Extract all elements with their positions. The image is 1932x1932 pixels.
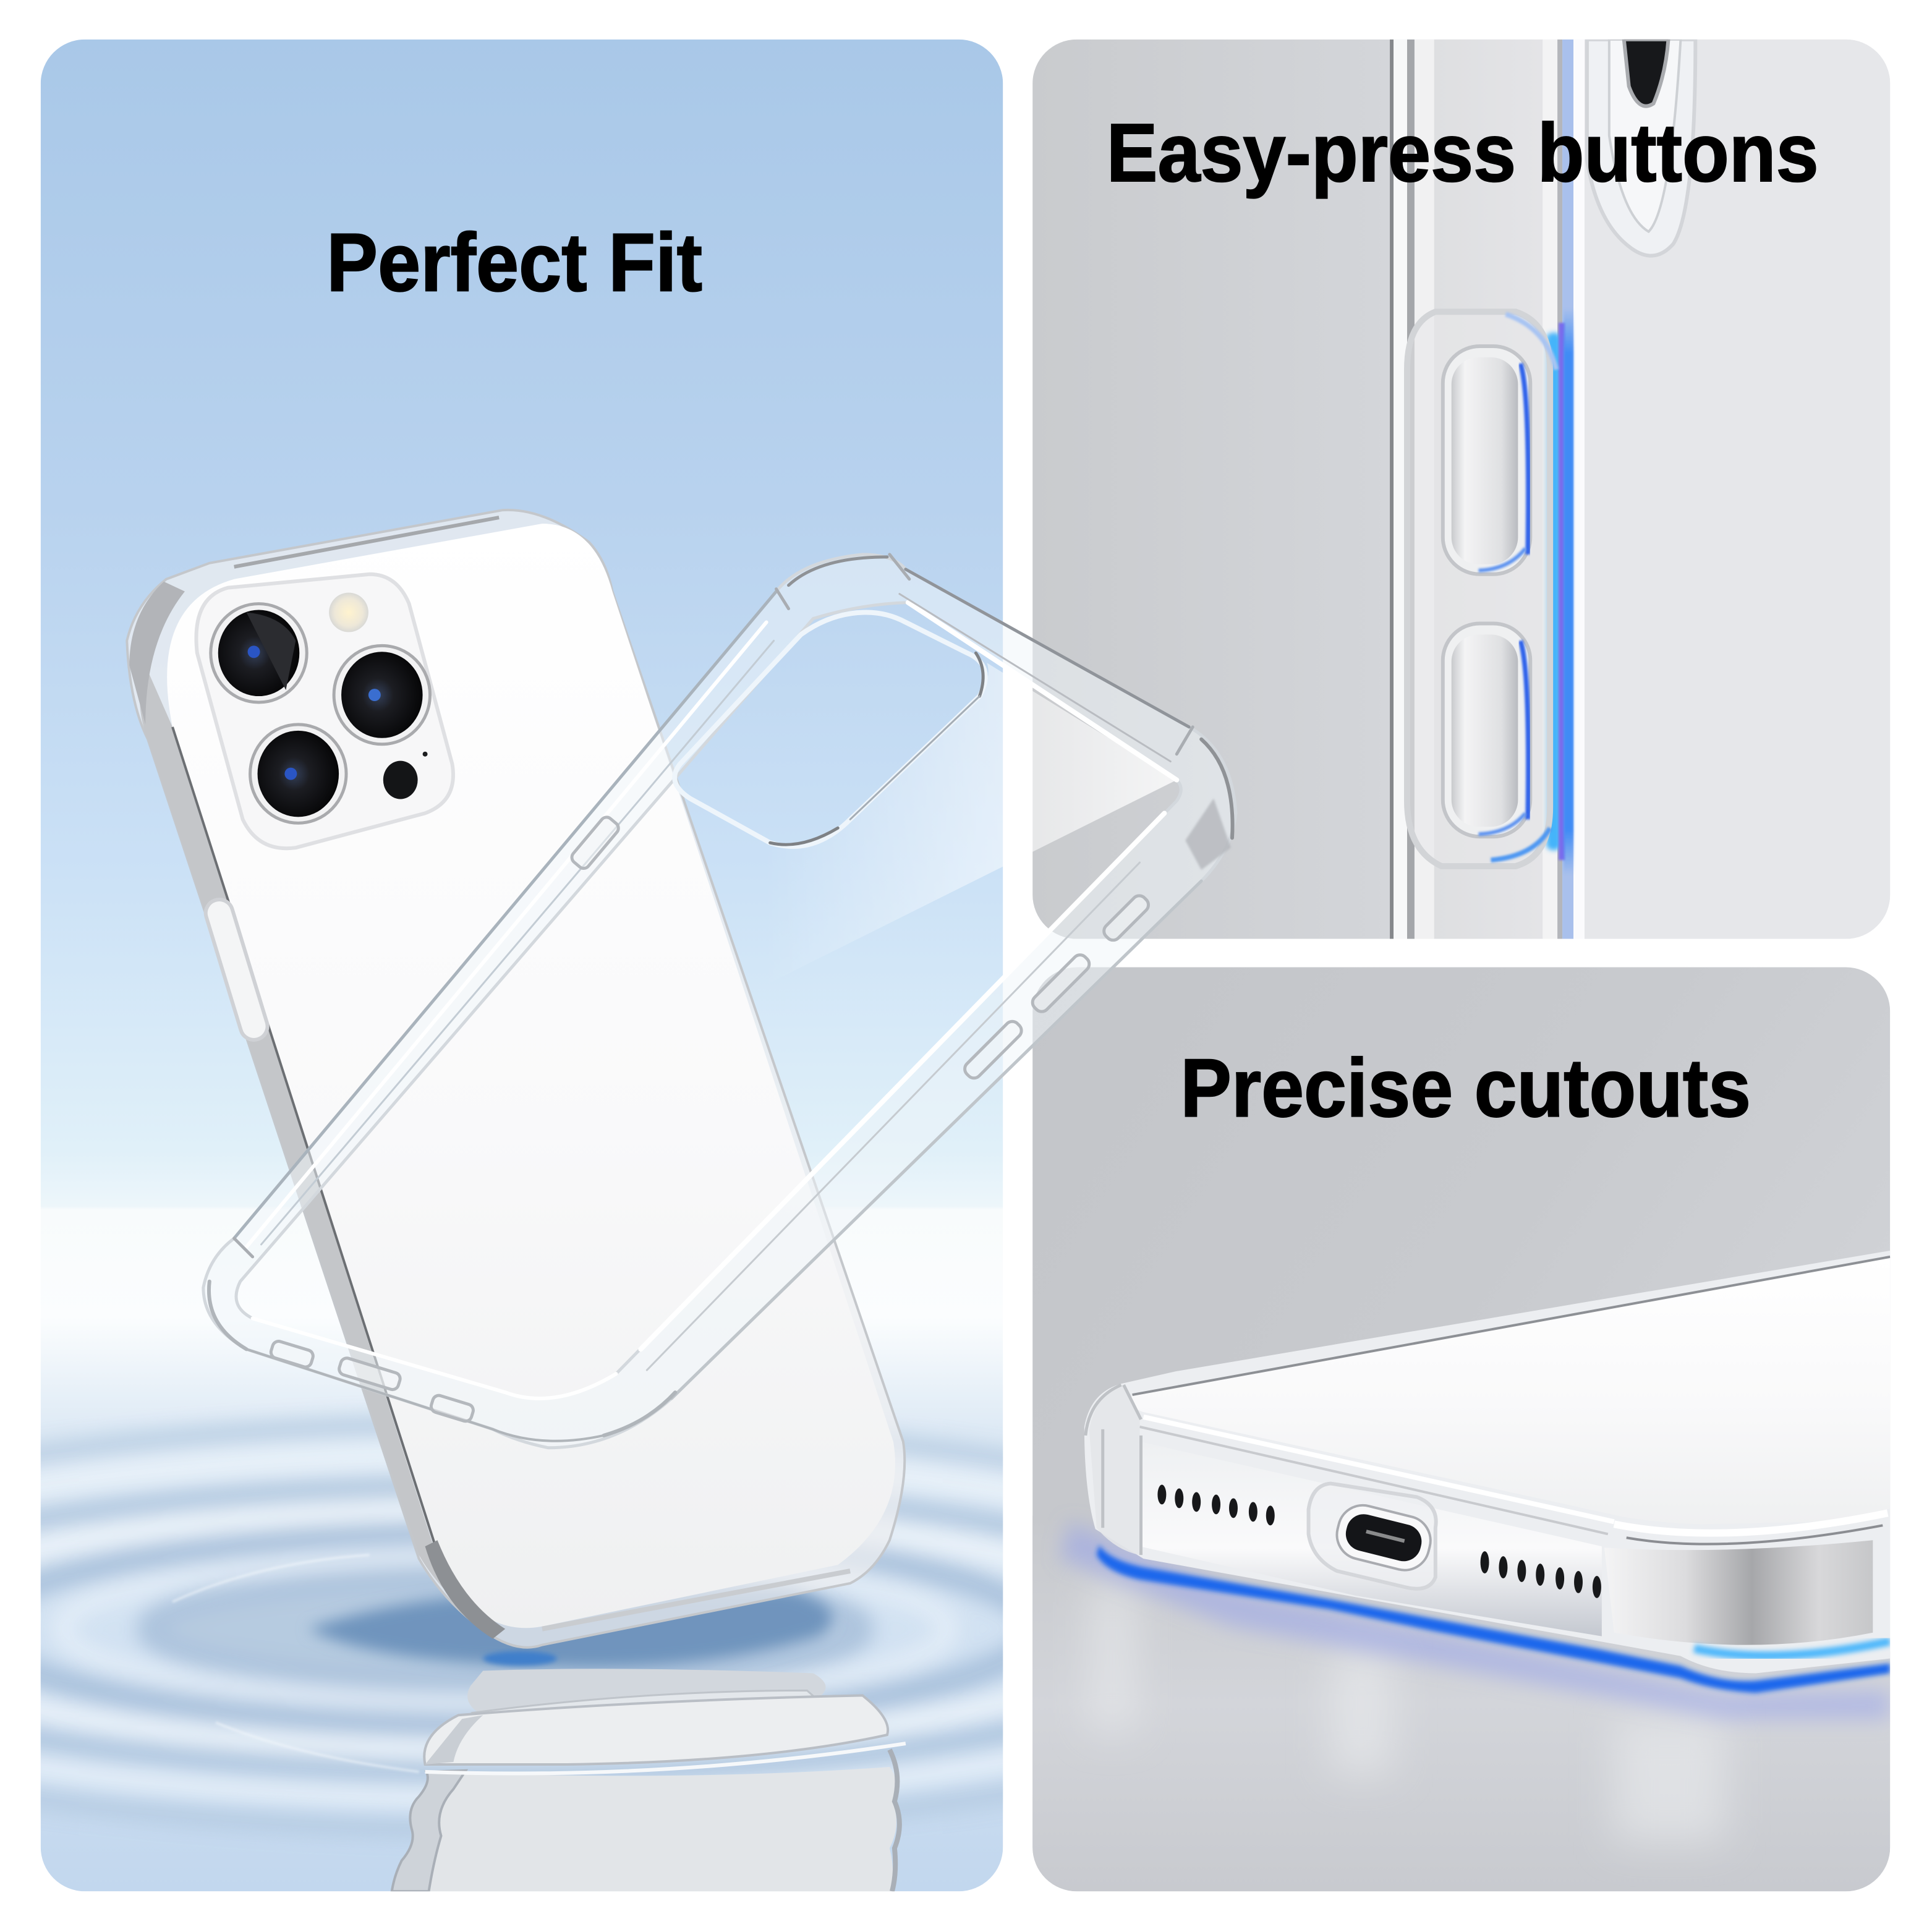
button bumper — [1407, 312, 1556, 866]
icon: bottom lens — [250, 725, 346, 823]
case translucent sheet upper right — [764, 663, 1177, 985]
floating clear case — [203, 555, 1236, 1448]
floor reflection — [1032, 1515, 1890, 1891]
left corner bumper — [1089, 1385, 1140, 1555]
icon: upper button — [1443, 346, 1530, 574]
icon: microphone dot — [423, 752, 428, 757]
phone shadow on water — [308, 1589, 832, 1668]
silver corner — [1604, 1540, 1873, 1645]
phone side strip — [1390, 40, 1890, 939]
camera module — [196, 574, 453, 848]
blue light strip under phone — [1097, 1545, 1890, 1693]
camera cutout outline — [674, 613, 985, 846]
panel: perfect fit background with water — [41, 40, 1003, 1892]
water ripples — [41, 1408, 1003, 1837]
reflection of phone in water — [392, 1669, 906, 1891]
phone outer case and silver side — [127, 510, 904, 1648]
title: Easy-press buttons: Easy-press buttons — [1107, 107, 1819, 199]
ripple lines — [172, 1555, 419, 1772]
title: Perfect Fit: Perfect Fit — [326, 216, 702, 309]
phone in clear case — [127, 510, 904, 1648]
icon: top left lens — [211, 604, 307, 702]
blue light strip — [1546, 308, 1573, 875]
panel: easy-press buttons background — [1032, 40, 1890, 939]
icon: flash — [329, 593, 368, 632]
panel: precise cutouts background — [1032, 967, 1890, 1891]
title: Precise cutouts: Precise cutouts — [1180, 1042, 1751, 1134]
side button — [202, 896, 271, 1043]
icon: charging port — [1309, 1484, 1436, 1589]
case edge highlights — [209, 555, 1233, 1441]
icon: right speaker holes — [1481, 1551, 1601, 1598]
phone bottom edge in clear case — [1084, 1251, 1890, 1673]
case corner silver — [1185, 798, 1231, 870]
case buttons — [270, 815, 1151, 1423]
case bumper band — [203, 555, 1236, 1448]
silver side highlight — [140, 665, 493, 1633]
icon: lower button — [1443, 623, 1530, 836]
icon: left speaker holes — [1157, 1485, 1275, 1525]
icon: lidar sensor — [383, 761, 418, 799]
icon: right lens — [334, 645, 430, 744]
phone back panel — [167, 524, 895, 1628]
icon: camera bump — [1587, 40, 1695, 256]
